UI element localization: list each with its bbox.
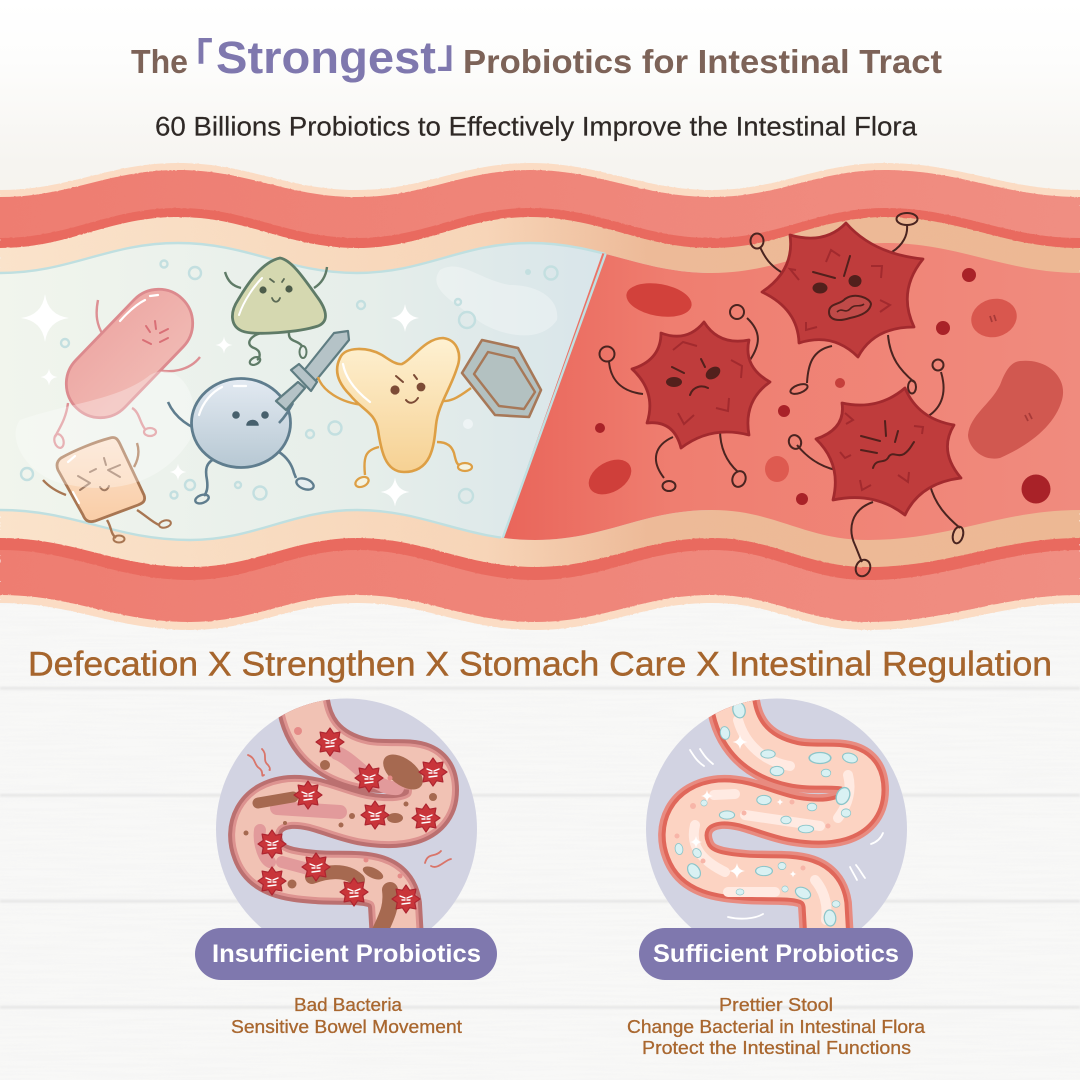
bad bacteria group [258, 728, 447, 913]
label pill [639, 928, 913, 980]
subtitle: 60 Billions Probiotics to Effectively Improve the Intestinal Flora [155, 112, 918, 142]
title: The [131, 43, 188, 80]
circle background [216, 698, 477, 960]
character: yellow Y probiotic with shield [318, 338, 541, 489]
intestinal tract band [0, 163, 1080, 630]
sparkles [690, 734, 796, 879]
character: bad bacterium left [600, 305, 770, 491]
title: Strongest [216, 32, 436, 83]
top background [0, 0, 1080, 300]
character: green triangle probiotic [225, 258, 327, 366]
caption: Protect the Intestinal Functions [642, 1038, 911, 1058]
caption: Sensitive Bowel Movement [231, 1017, 462, 1037]
illustration: healthy intestine [674, 690, 862, 940]
panel: sufficient probiotics [627, 690, 926, 1058]
caption [627, 995, 926, 1058]
character: pink rod probiotic [52, 275, 207, 449]
panel: insufficient probiotics [195, 690, 497, 1037]
blood cells and debris [583, 268, 1063, 505]
caption: Bad Bacteria [294, 995, 403, 1015]
icon: squiggle marks [248, 749, 451, 867]
title [131, 32, 942, 83]
icon: motion lines [690, 749, 883, 919]
character: bad bacterium bottom [787, 360, 965, 579]
title: 」 [437, 32, 477, 76]
character: orange square probiotic [43, 437, 172, 542]
caption [231, 995, 462, 1037]
panel: healthy probiotic side of lumen [0, 243, 712, 540]
title: 「 [173, 37, 213, 81]
bubbles and sparkles [21, 260, 558, 506]
label pill [195, 928, 497, 980]
label pill: Sufficient Probiotics [653, 940, 899, 968]
icon: sword [276, 331, 349, 410]
caption: Prettier Stool [719, 995, 833, 1015]
panel: bad bacteria side of lumen [500, 240, 1080, 545]
character: bad bacterium top [750, 213, 923, 396]
circle background [646, 698, 907, 960]
probiotic cells [674, 701, 859, 926]
heading: benefits: Defecation X Strengthen X Stomach Care X Intestinal Regulation [28, 646, 1052, 684]
caption: Change Bacterial in Intestinal Flora [627, 1017, 926, 1037]
icon: shield [462, 340, 541, 417]
wood plank background [0, 560, 1080, 1080]
title: Probiotics for Intestinal Tract [463, 43, 942, 80]
label pill: Insufficient Probiotics [212, 940, 481, 968]
pale glow over lower left characters [16, 371, 194, 488]
illustration: unhealthy intestine [244, 690, 447, 940]
character: blue round probiotic with sword [168, 331, 349, 505]
